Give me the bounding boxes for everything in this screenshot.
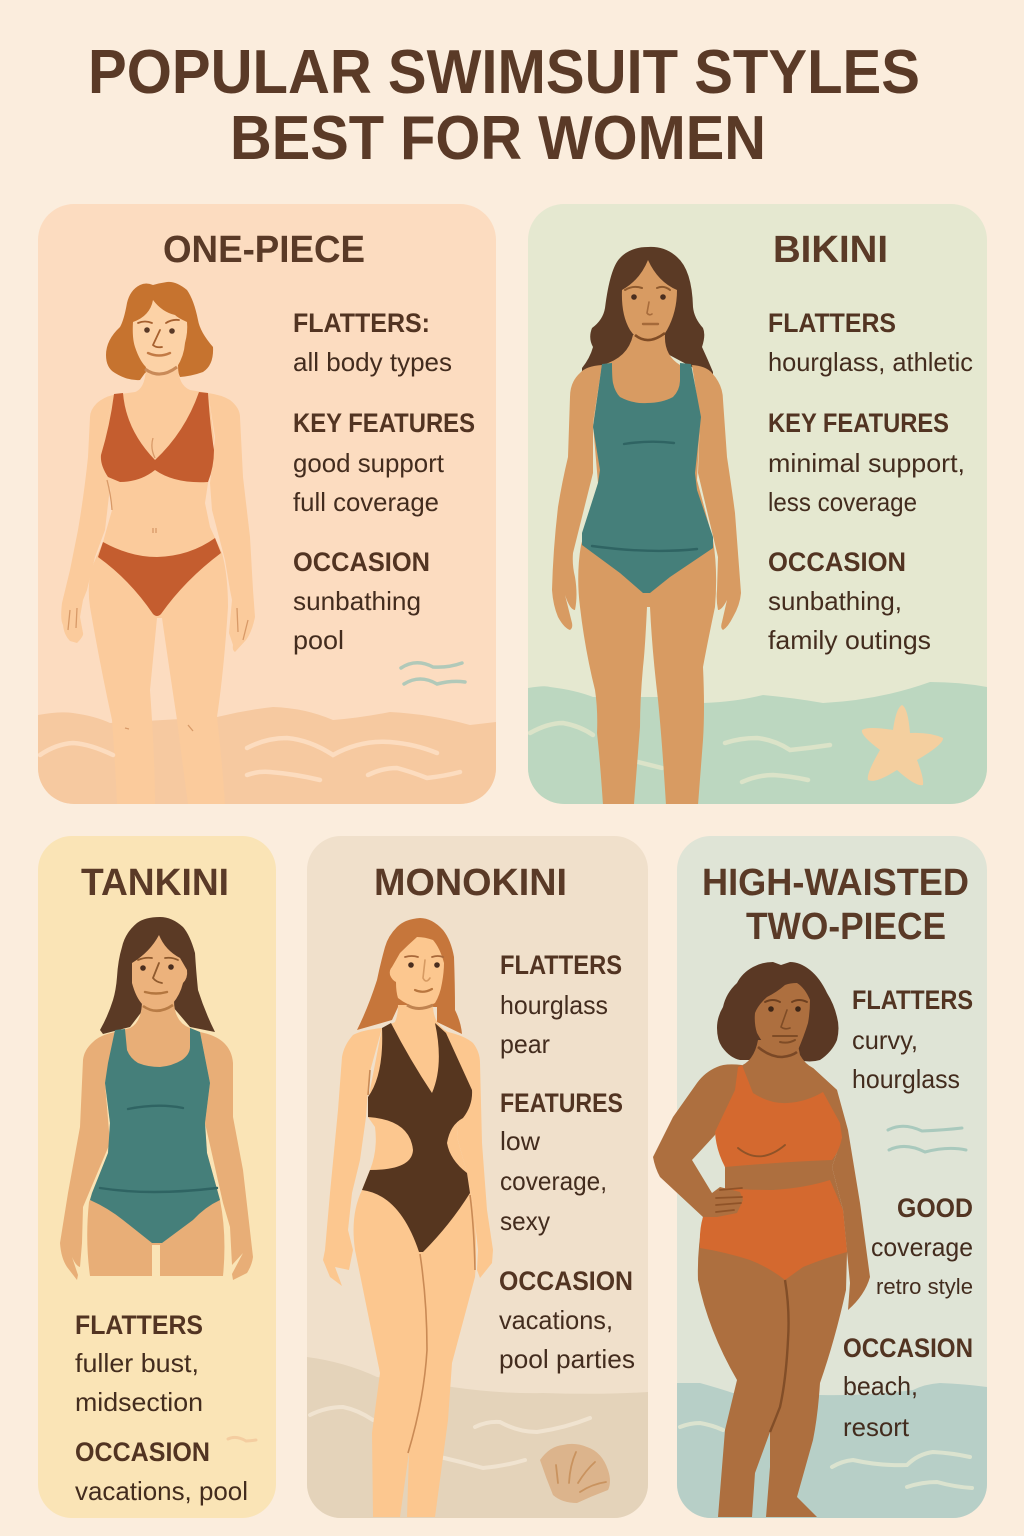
text: one-piece details: KEY FEATURES (293, 408, 475, 438)
panel: monokini (307, 836, 648, 1518)
text: bikini details: sunbathing, (768, 586, 902, 616)
text: bikini details (768, 308, 973, 655)
text: tankini details (75, 1310, 248, 1506)
arms (61, 395, 113, 643)
text: monokini details: hourglass (500, 990, 608, 1020)
hair (717, 962, 838, 1062)
torso and legs (698, 1040, 847, 1517)
text: high-waisted details: resort (843, 1412, 910, 1442)
water ripples (530, 723, 830, 782)
text: tankini details: fuller bust, (75, 1348, 199, 1378)
text: one-piece details: pool (293, 625, 344, 655)
text: tankini details: FLATTERS (75, 1310, 203, 1340)
text: monokini details: FEATURES (500, 1088, 623, 1118)
hair (106, 282, 213, 380)
text: monokini details: sexy (500, 1206, 550, 1236)
arms (653, 1064, 743, 1217)
icon: starfish (862, 705, 943, 785)
heading: monokini: MONOKINI (374, 862, 567, 904)
torso and legs (88, 365, 228, 723)
text: monokini details: FLATTERS (500, 950, 622, 980)
text: high-waisted details: retro style (876, 1274, 973, 1299)
text: one-piece details: good support (293, 448, 445, 478)
text: tankini details: midsection (75, 1387, 203, 1417)
figure: woman in dark cut-out monokini (323, 918, 493, 1517)
panel: bikini (528, 204, 987, 805)
text: bikini details: family outings (768, 625, 931, 655)
icon: waves (401, 663, 465, 684)
figure: woman in red-orange bikini (61, 282, 255, 732)
hair (357, 918, 462, 1034)
figure: woman in orange high-waisted two-piece (653, 962, 870, 1517)
face (622, 260, 677, 342)
tankini (90, 1028, 220, 1243)
text: high-waisted details: GOOD (897, 1193, 973, 1223)
face (132, 935, 187, 1012)
heading: bikini: BIKINI (773, 229, 888, 271)
panel: tankini (38, 836, 276, 1518)
text: bikini details: FLATTERS (768, 308, 896, 338)
heading: one-piece: ONE-PIECE (163, 229, 365, 271)
hair (582, 247, 713, 378)
heading: high-waisted two-piece (702, 862, 969, 948)
sand (38, 707, 496, 804)
text: bikini details: minimal support, (768, 448, 965, 478)
text: one-piece details: full coverage (293, 487, 439, 517)
text: bikini details: OCCASION (768, 547, 906, 577)
text: high-waisted details: curvy, (852, 1025, 918, 1055)
text: high-waisted details: OCCASION (843, 1333, 973, 1363)
text: one-piece details: all body types (293, 347, 452, 377)
text: monokini details: coverage, (500, 1166, 607, 1196)
text: high-waisted details: FLATTERS (852, 985, 973, 1015)
text: high-waisted details: coverage (871, 1232, 973, 1262)
icon: faint shell (228, 1437, 256, 1441)
icon: waves (888, 1126, 966, 1152)
torso and legs (87, 1000, 224, 1276)
text: bikini details: KEY FEATURES (768, 408, 949, 438)
text: one-piece details: FLATTERS: (293, 308, 430, 338)
text: one-piece details (293, 308, 475, 655)
water (677, 1383, 987, 1518)
figure: woman in teal swimsuit (552, 247, 741, 805)
title: BEST FOR WOMEN (230, 104, 766, 173)
sand ripples (310, 1407, 590, 1468)
text: one-piece details: sunbathing (293, 586, 421, 616)
title: POPULAR SWIMSUIT STYLES (88, 38, 920, 107)
face (390, 937, 444, 1008)
heading: high-waisted two-piece: HIGH-WAISTED (702, 862, 969, 904)
bottoms (700, 1180, 847, 1280)
text: high-waisted details: beach, (843, 1371, 918, 1401)
face (754, 983, 810, 1048)
hair (100, 917, 215, 1034)
water (528, 682, 987, 804)
sand (307, 1357, 648, 1518)
text: monokini details: pool parties (499, 1344, 635, 1374)
heading: high-waisted two-piece: TWO-PIECE (746, 906, 946, 948)
title (88, 38, 920, 173)
arms (552, 365, 602, 630)
text: tankini details: OCCASION (75, 1437, 210, 1467)
monokini (362, 1023, 472, 1252)
text: one-piece details: OCCASION (293, 547, 430, 577)
panel: high-waisted two-piece (653, 836, 987, 1518)
text: high-waisted details (843, 985, 973, 1442)
text: monokini details: low (500, 1126, 540, 1156)
figure: woman in teal tankini (60, 917, 253, 1280)
torso and legs (578, 335, 716, 805)
text: monokini details: vacations, (499, 1305, 613, 1335)
icon: seashell (540, 1444, 610, 1503)
torso and legs (354, 1005, 476, 1517)
text: bikini details: less coverage (768, 487, 917, 517)
text: high-waisted details: hourglass (852, 1064, 960, 1094)
heading: tankini: TANKINI (81, 862, 229, 904)
text: monokini details (499, 950, 635, 1374)
bikini top (101, 392, 214, 482)
arms (323, 1028, 382, 1286)
water ripples (680, 1423, 972, 1488)
top (715, 1065, 842, 1167)
text: bikini details: hourglass, athletic (768, 347, 973, 377)
text: tankini details: vacations, pool (75, 1476, 248, 1506)
sand ripples (40, 738, 460, 780)
face (133, 300, 187, 374)
text: monokini details: pear (500, 1029, 550, 1059)
swimsuit (582, 363, 713, 593)
text: monokini details: OCCASION (499, 1266, 633, 1296)
bikini bottom (98, 538, 221, 616)
arms (60, 1032, 115, 1280)
panel: one-piece (38, 204, 496, 804)
